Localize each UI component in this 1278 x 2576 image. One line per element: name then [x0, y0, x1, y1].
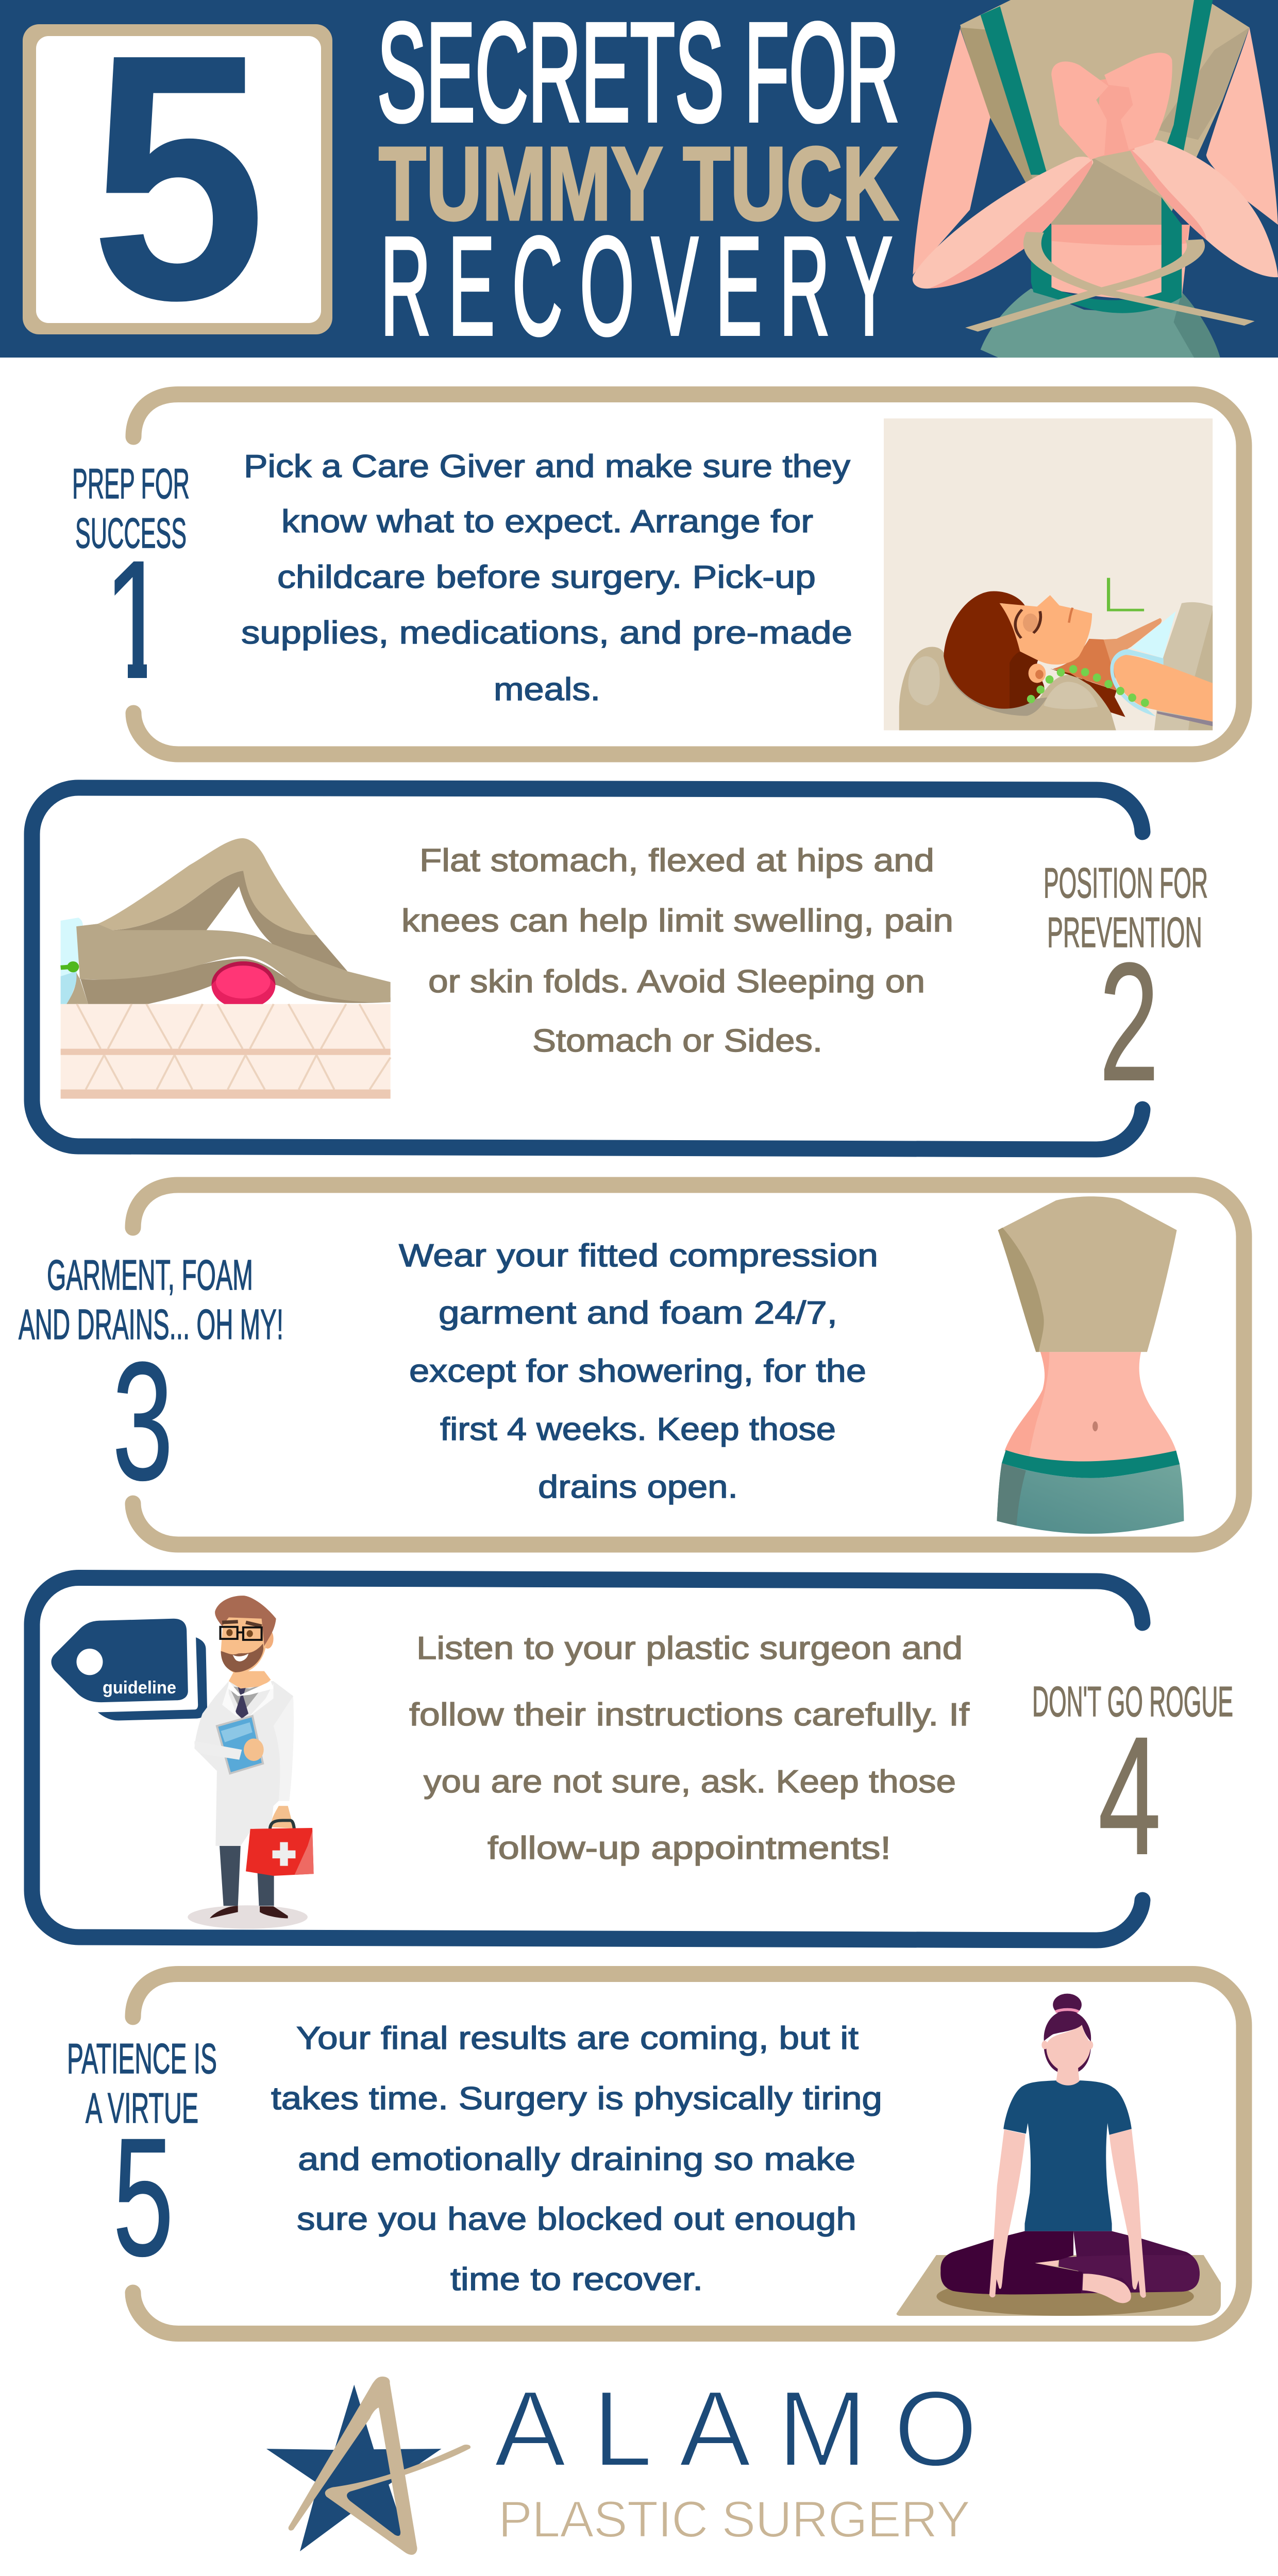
mattress	[61, 1004, 391, 1099]
panel 5 text: sure you have blocked out enough	[297, 2201, 856, 2237]
panel 2 text: Flat stomach, flexed at hips and	[419, 843, 934, 878]
panel 1 text: supplies, medications, and pre-made	[241, 615, 852, 651]
panel 5 text	[271, 2021, 882, 2297]
panel 1: prep for success	[72, 395, 1244, 754]
title: TUMMY TUCK	[379, 125, 898, 242]
panel 2 text: or skin folds. Avoid Sleeping on	[428, 964, 925, 999]
panel 2 text	[401, 843, 953, 1059]
panel 3 heading: GARMENT, FOAM	[47, 1251, 253, 1299]
panel 1 heading: SUCCESS	[75, 509, 187, 557]
panel 2 heading	[1044, 859, 1208, 956]
panel 5 text: and emotionally draining so make	[298, 2142, 855, 2177]
panel 3 text: drains open.	[538, 1469, 738, 1505]
panel 4 text: follow-up appointments!	[487, 1831, 891, 1866]
panel 3 text: except for showering, for the	[409, 1353, 866, 1389]
panel 1 number: 1	[104, 526, 168, 714]
illustration: woman lying on pillow	[884, 418, 1213, 731]
panel 3 frame	[133, 1185, 1244, 1545]
icon: guideline tag	[51, 1619, 207, 1721]
illustration: torso with compression garment	[997, 1196, 1184, 1534]
panel 1 frame	[133, 395, 1244, 754]
panel 1 text: childcare before surgery. Pick-up	[277, 560, 816, 595]
panel 2: position for prevention	[32, 788, 1208, 1149]
panel 5 frame	[133, 1974, 1244, 2334]
illustration: doctor with first aid case	[188, 1596, 314, 1929]
panel 4 text: follow their instructions carefully. If	[409, 1697, 970, 1733]
panel 2 text: Stomach or Sides.	[532, 1023, 822, 1059]
illustration: woman tying garment	[913, 0, 1278, 358]
logo wordmark: PLASTIC SURGERY	[498, 2490, 970, 2548]
icon: guideline tag: guideline	[103, 1678, 176, 1698]
logo mark: star and letter A	[266, 2377, 470, 2555]
panel 4 number: 4	[1098, 1702, 1161, 1890]
panel 4 text: Listen to your plastic surgeon and	[416, 1631, 963, 1666]
panel 2 text: knees can help limit swelling, pain	[401, 903, 953, 939]
panel 5 text: time to recover.	[450, 2262, 703, 2297]
panel 4: don't go rogue	[32, 1578, 1233, 1940]
panel 3: garment, foam and drains	[19, 1185, 1244, 1545]
logo wordmark	[494, 2369, 978, 2548]
panel 3 text	[399, 1238, 878, 1505]
panel 1 text: Pick a Care Giver and make sure they	[244, 449, 850, 484]
panel 3 text: garment and foam 24/7,	[439, 1295, 837, 1331]
illustration: woman seated cross-legged on mat	[897, 1994, 1221, 2316]
panel 4 frame	[32, 1578, 1142, 1940]
panel 5 heading: PATIENCE IS	[67, 2035, 217, 2082]
panel 3 number: 3	[112, 1328, 173, 1515]
panel 5 number: 5	[113, 2104, 174, 2291]
panel 1 number	[98, 526, 173, 714]
panel 3 heading: AND DRAINS... OH MY!	[19, 1300, 283, 1348]
panel 3 text: Wear your fitted compression	[399, 1238, 878, 1274]
footer logo: Alamo Plastic Surgery	[266, 2369, 978, 2555]
panel 4 text: you are not sure, ask. Keep those	[424, 1764, 956, 1800]
panel 5 text: Your final results are coming, but it	[296, 2021, 859, 2056]
panel 5: patience is a virtue	[67, 1974, 1244, 2334]
panel 3 text: first 4 weeks. Keep those	[440, 1412, 836, 1447]
title: RECOVERY	[380, 207, 893, 364]
panel 2 number: 2	[1099, 928, 1159, 1116]
panel 5 text: takes time. Surgery is physically tiring	[271, 2081, 882, 2116]
panel 4 text	[409, 1631, 970, 1866]
panel 1 text: meals.	[494, 672, 600, 707]
panel 5 heading: A VIRTUE	[86, 2084, 198, 2132]
panel 1 heading: PREP FOR	[72, 460, 190, 507]
logo wordmark: ALAMO	[494, 2369, 978, 2489]
number badge	[23, 0, 332, 373]
illustration: legs flexed over bolster on mattress	[61, 838, 391, 1099]
title	[377, 0, 899, 364]
panel 1 heading	[72, 460, 190, 557]
panel 3 heading	[19, 1251, 283, 1348]
panel 5 heading	[67, 2035, 217, 2132]
panel 1 text	[241, 449, 852, 707]
panel 1 text: know what to expect. Arrange for	[281, 504, 813, 539]
header banner	[0, 0, 1278, 373]
panel 2 frame	[32, 788, 1142, 1149]
